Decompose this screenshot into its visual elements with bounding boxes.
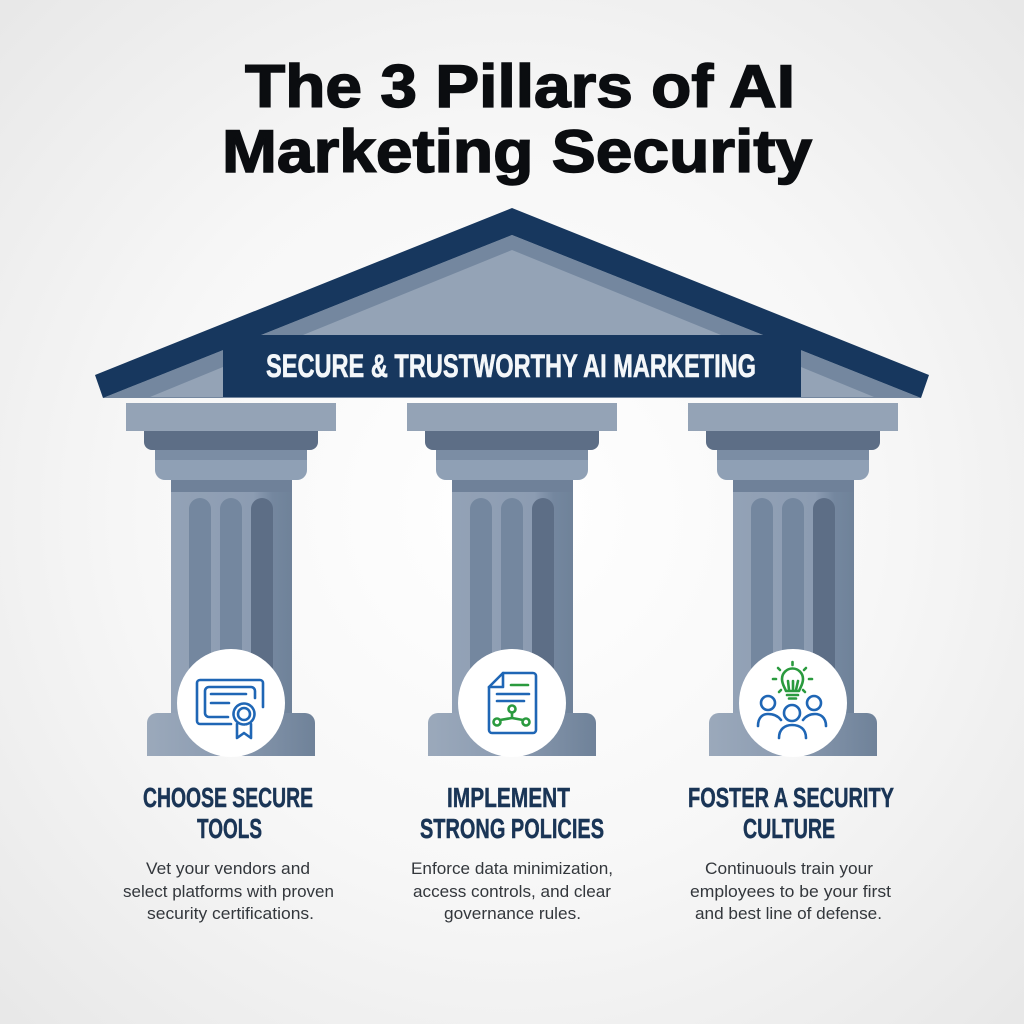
column 2 text xyxy=(411,782,613,923)
pillar 3 xyxy=(688,403,898,757)
description: implement strong policies: governance rules. xyxy=(444,905,581,923)
roof pediment xyxy=(95,208,929,398)
icon: policy document xyxy=(489,673,536,733)
description: foster a security culture: and best line of defense. xyxy=(695,905,882,923)
heading: implement strong policies: STRONG POLICIES xyxy=(420,813,604,844)
banner xyxy=(223,335,801,397)
title: Marketing Security xyxy=(222,118,813,185)
description: implement strong policies: access controls, and clear xyxy=(413,883,612,901)
banner: SECURE & TRUSTWORTHY AI MARKETING xyxy=(266,348,756,384)
column 3 text xyxy=(688,782,894,923)
column 1 text xyxy=(123,782,334,923)
description: foster a security culture: employees to be your first xyxy=(690,883,891,901)
description: implement strong policies xyxy=(411,860,613,923)
heading: foster a security culture: FOSTER A SECURITY xyxy=(688,782,894,813)
heading: choose secure tools: CHOOSE SECURE xyxy=(143,782,313,813)
title xyxy=(222,53,813,185)
description: choose secure tools: Vet your vendors and xyxy=(146,860,310,878)
pillar 2 xyxy=(407,403,617,757)
icon: certificate xyxy=(197,680,263,738)
description: foster a security culture: Continuouls train your xyxy=(705,860,874,878)
heading: implement strong policies xyxy=(420,782,604,844)
heading: foster a security culture: CULTURE xyxy=(743,813,835,844)
heading: choose secure tools: TOOLS xyxy=(197,813,262,844)
heading: choose secure tools xyxy=(143,782,313,844)
description: foster a security culture xyxy=(690,860,891,923)
title: The 3 Pillars of AI xyxy=(245,53,795,120)
pillar 1 xyxy=(126,403,336,757)
description: choose secure tools: select platforms with proven xyxy=(123,883,334,901)
heading: implement strong policies: IMPLEMENT xyxy=(447,782,570,813)
description: implement strong policies: Enforce data minimization, xyxy=(411,860,613,878)
heading: foster a security culture xyxy=(688,782,894,844)
icon: team with light bulb xyxy=(758,662,826,738)
description: choose secure tools xyxy=(123,860,334,923)
description: choose secure tools: security certifications. xyxy=(147,905,314,923)
